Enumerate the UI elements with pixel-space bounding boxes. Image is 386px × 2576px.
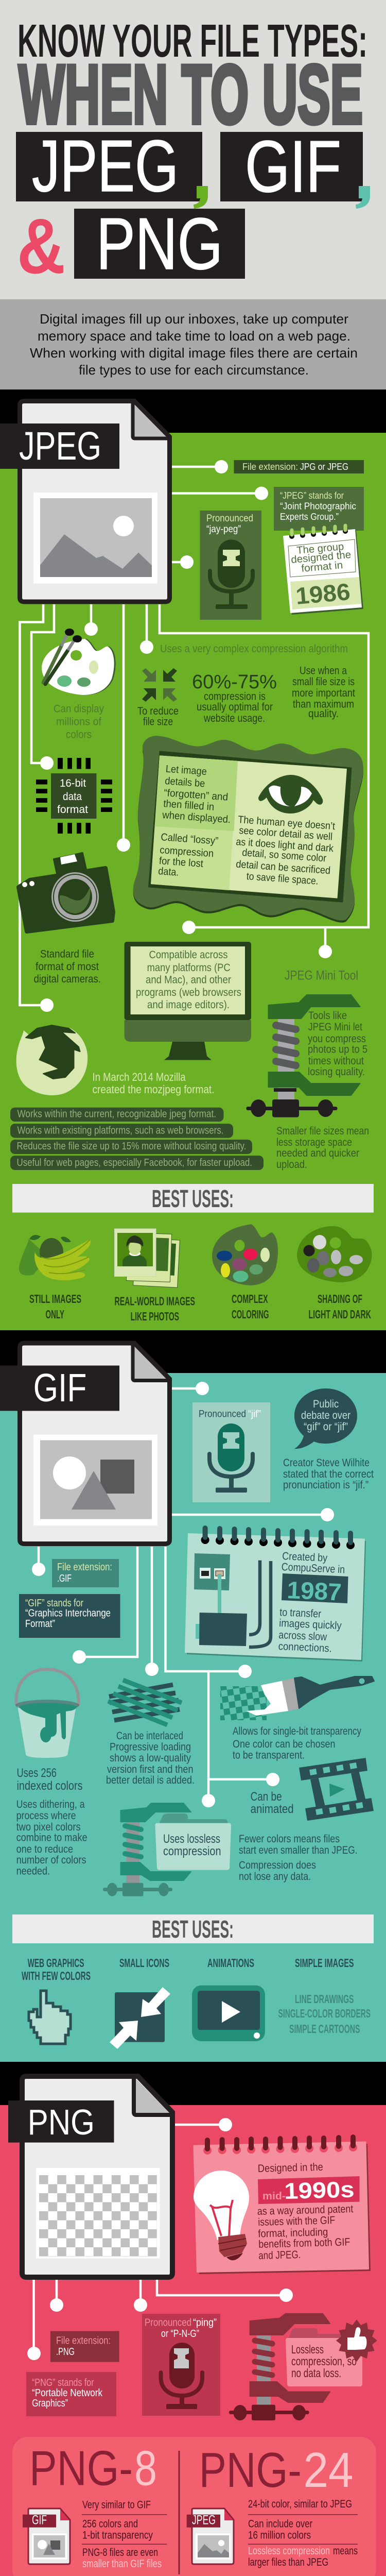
connector lines	[34, 2125, 283, 2349]
text: use when small: than maximum	[293, 699, 354, 710]
icon: 16-bit chip: format	[57, 804, 88, 816]
PNG-8 details: 1-bit transparency	[82, 2530, 153, 2541]
file extension box	[52, 1559, 119, 1587]
best use labels	[22, 1956, 354, 1982]
stands for box	[274, 487, 364, 531]
stands for box: “GIF” stands for	[25, 1598, 83, 1609]
text: mozjpeg: created the mozjpeg format.	[93, 1083, 214, 1096]
icon: clamp with folder: Uses lossless	[163, 1832, 220, 1846]
icon: crossing stripes	[108, 1680, 182, 1725]
text: creator: Creator Steve Wilhite	[283, 1457, 370, 1469]
stands for box: Format”	[25, 1618, 55, 1630]
text: indexed colors: indexed colors	[16, 1779, 82, 1793]
text: tools like JPEG mini: losing quality.	[308, 1066, 365, 1078]
text: dithering: combine to make	[16, 1832, 87, 1844]
tablet text: Let image	[165, 764, 207, 777]
text: smaller file sizes: needed and quicker	[276, 1147, 359, 1159]
text: tools like JPEG mini: times without	[308, 1055, 364, 1067]
text: smaller file sizes: upload.	[276, 1159, 307, 1171]
tablet	[149, 752, 351, 902]
PNG-24 details: 16 million colors	[248, 2530, 311, 2541]
notepad: 1986: designed the	[291, 549, 352, 566]
eye icon	[258, 775, 323, 814]
intro band	[0, 299, 386, 389]
icon: complex color palette	[212, 1224, 278, 1285]
stands for box	[19, 1594, 120, 1638]
panel: PNG-8 and PNG-24	[12, 2437, 376, 2576]
best uses banner: BEST USES:	[152, 1916, 234, 1943]
connector dots	[27, 2118, 293, 2360]
tablet text: then filled in	[163, 798, 215, 813]
black header band: PNG	[0, 2062, 386, 2105]
icon: 16-bit chip: data	[63, 791, 82, 803]
text: use when small: more important	[292, 687, 355, 699]
icon: thumbs up badge	[336, 2319, 377, 2362]
tablet text: detail can be sacrificed	[236, 859, 331, 876]
best use labels: ANIMATIONS	[207, 1956, 254, 1970]
best use labels	[29, 1292, 371, 1323]
pronounced box with microphone: “ping”	[193, 2317, 217, 2329]
PNG-8 details: 256 colors and	[82, 2518, 138, 2530]
icon: paint palette	[42, 629, 116, 695]
text: tools like JPEG mini: Tools like	[308, 1010, 347, 1022]
text: to reduce file size: file size	[143, 716, 173, 727]
best use labels: STILL IMAGES	[29, 1292, 81, 1306]
text: indexed colors	[16, 1766, 82, 1793]
PNG-24 details	[248, 2498, 358, 2568]
text: creator: pronunciation is “jif.”	[283, 1479, 369, 1491]
pronounced box with microphone: Pronounced	[199, 1409, 246, 1420]
text: tools like JPEG mini: photos up to 5	[308, 1044, 367, 1056]
icon: fruit	[19, 1235, 91, 1280]
monitor	[125, 942, 251, 1060]
text: tools like JPEG mini	[308, 1010, 367, 1078]
icon: small compress	[110, 1987, 170, 2049]
PNG-8 details: smaller than GIF files	[82, 2558, 162, 2570]
mozjpeg pills: Reduces the file size up to 15% more without losing quality.	[16, 1141, 246, 1152]
tablet text: as it does light and dark	[236, 836, 335, 854]
PNG-24 details: larger files than JPEG	[248, 2556, 328, 2568]
notepad: 1987	[185, 1528, 366, 1662]
icon: shading palette	[297, 1226, 372, 1282]
tablet text: see color detail as well	[239, 825, 333, 843]
icon: small JPEG file: JPEG	[192, 2513, 216, 2528]
icon: compress arrows	[142, 668, 177, 702]
icon: clamp with folder	[103, 1803, 231, 1896]
best use labels: ONLY	[45, 1308, 64, 1321]
notepad: 1986: The group	[296, 541, 344, 556]
pronounced box with microphone	[192, 1402, 270, 1502]
icon: firefox	[16, 1025, 87, 1095]
monitor: many platforms (PC	[147, 962, 231, 974]
speech bubble: “gif” or “jif”	[304, 1421, 348, 1433]
notepad: 1987: CompuServe in	[281, 1561, 345, 1575]
icon: clamp	[246, 995, 360, 1117]
text: mozjpeg	[93, 1071, 214, 1096]
file extension box	[50, 2331, 119, 2362]
intro text: When working with digital image files there are certain	[30, 345, 358, 361]
text: use when small: small file size is	[292, 676, 355, 688]
pronounced box with microphone: Pronounced	[206, 513, 253, 524]
speech bubble	[294, 1388, 357, 1449]
tablet text: data.	[158, 866, 179, 878]
notepad: 1986: format in	[301, 560, 343, 574]
blob with tablet	[133, 736, 363, 923]
text: interlaced: version first and then	[107, 1764, 194, 1775]
icon: 16-bit chip	[36, 758, 112, 834]
icon: GIF file	[20, 1343, 171, 1544]
text: dithering	[16, 1799, 87, 1877]
mozjpeg pills: Works within the current, recognizable jpeg format.	[17, 1109, 216, 1120]
notepad: mid-1990s: and JPEG.	[258, 2249, 301, 2262]
stands for box: “PNG” stands for	[32, 2377, 94, 2388]
text: millions of colors: millions of	[56, 716, 101, 727]
notepad: 1987: 1987	[287, 1576, 342, 1606]
teal comma	[356, 186, 370, 209]
PNG-24 details: Can include over	[248, 2518, 312, 2530]
text: interlaced: better detail is added.	[106, 1774, 195, 1786]
text: interlaced: shows a low-quality	[110, 1752, 191, 1764]
text: mozjpeg: In March 2014 Mozilla	[93, 1071, 186, 1083]
monitor: and Mac), and other	[146, 974, 231, 986]
text: single-bit transparency	[233, 1725, 361, 1761]
tablet text: compression	[160, 844, 214, 859]
text: standard file format: digital cameras.	[34, 973, 101, 985]
speech bubble: debate over	[301, 1410, 350, 1421]
text: to reduce file size: To reduce	[137, 705, 179, 717]
panel: JPEG	[0, 401, 386, 1330]
title	[16, 15, 370, 290]
text: use when small: Use when a	[300, 665, 347, 677]
PNG-24 details: means	[333, 2545, 358, 2557]
notepad: mid-1990s: 1990s	[284, 2177, 355, 2204]
stat: 60-75 percent: 60%-75%	[192, 671, 277, 693]
notepad: mid-1990s: Designed in the	[258, 2161, 323, 2175]
text: to reduce file size	[137, 705, 179, 727]
text: dithering: Uses dithering, a	[16, 1799, 85, 1810]
icon: paint bucket	[15, 1669, 79, 1758]
text: interlaced: Progressive loading	[110, 1741, 191, 1753]
PNG-24 details: Lossless compression	[248, 2545, 330, 2557]
text: dithering: two pixel colors	[16, 1821, 81, 1833]
panel: GIF	[0, 1343, 386, 2062]
best use labels: SMALL ICONS	[119, 1956, 169, 1970]
text: use when small	[292, 665, 355, 720]
black header band: JPEG	[0, 389, 386, 433]
notepad: 1986	[283, 526, 363, 615]
text: creator: stated that the correct	[283, 1468, 374, 1480]
icon: clamp with folder: compression	[163, 1844, 221, 1858]
icon: video player	[192, 1986, 265, 2041]
text: dithering: process where	[16, 1810, 76, 1822]
text: smaller file sizes: less storage space	[276, 1137, 352, 1148]
intro text: memory space and take time to load on a web page.	[38, 328, 350, 344]
best use labels: COMPLEX	[232, 1292, 268, 1306]
text: single-bit transparency: to be transparent.	[233, 1750, 305, 1761]
stat: 60-75 percent	[192, 671, 277, 724]
icon: film strip	[299, 1758, 374, 1821]
PNG-24 heading: 24	[304, 2443, 353, 2498]
icon: pixel hand	[29, 1991, 71, 2044]
file extension box: File extension:	[242, 462, 298, 472]
PNG title box: PNG	[96, 203, 223, 285]
intro text: file types to use for each circumstance.	[79, 362, 309, 378]
text: fewer colors: not lose any data.	[239, 1871, 311, 1883]
stands for box: Experts Group.”	[280, 512, 339, 522]
icon: small GIF file	[23, 2509, 70, 2564]
mozjpeg pills: Useful for web pages, especially Facebook, for faster upload.	[16, 1157, 252, 1168]
text: standard file format: format of most	[36, 961, 99, 973]
text: tools like JPEG mini: JPEG Mini let	[308, 1021, 362, 1033]
file extension box: File extension:	[56, 2335, 111, 2347]
notepad: mid-1990s	[194, 2137, 371, 2274]
PNG-8 details: PNG-8 files are even	[82, 2547, 158, 2558]
PNG-24 heading: PNG-	[199, 2443, 302, 2498]
best use labels: WITH FEW COLORS	[22, 1969, 91, 1982]
connector lines	[20, 467, 369, 1005]
file extension box: .PNG	[56, 2346, 75, 2358]
tablet text: Called “lossy”	[161, 832, 219, 847]
best use labels: WEB GRAPHICS	[28, 1956, 84, 1970]
intro text	[30, 311, 358, 378]
pronounced box with microphone: Pronounced	[145, 2317, 191, 2329]
stands for box: “Graphics Interchange	[25, 1607, 111, 1619]
network diagram	[194, 1553, 271, 1647]
icon: camera	[19, 853, 113, 931]
notepad: mid-1990s: mid-	[262, 2191, 286, 2202]
JPEG tag: JPEG	[19, 424, 101, 468]
notepad: 1987: connections.	[278, 1640, 332, 1655]
file extension box: File extension:	[57, 1562, 112, 1573]
text: compression algorithm heading: Uses a very complex compression algorithm	[160, 643, 348, 655]
tablet text: to save file space.	[246, 871, 319, 887]
JPEG title box: JPEG	[32, 125, 179, 207]
simple images list	[278, 1992, 371, 2036]
text: single-bit transparency: One color can be chosen	[233, 1738, 336, 1750]
text: millions of colors: colors	[66, 728, 92, 741]
text: fewer colors: start even smaller than JPEG.	[239, 1844, 358, 1856]
monitor: programs (web browsers	[136, 987, 241, 998]
text: interlaced	[106, 1730, 195, 1786]
best use labels: REAL-WORLD IMAGES	[114, 1295, 195, 1308]
text: dithering: number of colors	[16, 1854, 86, 1866]
text: fewer colors: Fewer colors means files	[239, 1833, 340, 1845]
notepad: mid-1990s: as a way around patent	[257, 2203, 354, 2217]
pronounced box with microphone: or “P-N-G”	[161, 2328, 199, 2340]
text: indexed colors: Uses 256	[16, 1766, 57, 1780]
tablet text: “forgotten” and	[164, 787, 229, 803]
PNG-8 heading: PNG-	[29, 2441, 133, 2496]
PNG-8 heading: 8	[134, 2441, 157, 2496]
connector dots	[40, 460, 332, 1012]
text: millions of colors	[54, 703, 104, 741]
best uses banner: BEST USES:	[152, 1185, 234, 1213]
stat: 60-75 percent: usually optimal for	[197, 701, 273, 713]
text: dithering: needed.	[16, 1865, 50, 1877]
stands for box: “Portable Network	[32, 2387, 103, 2399]
pronounced box with microphone	[142, 2314, 220, 2416]
tablet text	[158, 764, 336, 887]
best use labels: COLORING	[232, 1308, 269, 1321]
text: smaller file sizes: Smaller file sizes mean	[276, 1125, 369, 1137]
speech bubble: Public	[313, 1398, 339, 1410]
file extension box: .GIF	[57, 1573, 72, 1584]
stands for box: “JPEG” stands for	[280, 490, 344, 501]
best use labels: LIKE PHOTOS	[131, 1310, 179, 1323]
icon: light bulb	[194, 2171, 249, 2260]
mozjpeg pills	[10, 1108, 264, 1170]
icon: small JPEG file	[187, 2509, 234, 2564]
text: fewer colors	[239, 1833, 358, 1883]
text: millions of colors: Can display	[54, 703, 104, 715]
GIF tag: GIF	[33, 1366, 86, 1410]
connector dots	[32, 1382, 334, 1807]
GIF tag	[0, 1365, 119, 1411]
text: interlaced: Can be interlaced	[116, 1730, 183, 1742]
icon: paint brush	[220, 1676, 374, 1720]
text: smaller file sizes	[276, 1125, 369, 1171]
tablet text: detail, so some color	[242, 847, 327, 864]
text: tools like JPEG mini: you compress	[308, 1033, 366, 1045]
file extension box: JPG or JPEG	[300, 462, 348, 472]
PNG-24 details: 24-bit color, similar to JPEG	[248, 2498, 352, 2510]
icon: clamp with folder and thumbs up	[229, 2314, 377, 2420]
text: fewer colors: Compression does	[239, 1859, 316, 1871]
notepad: 1987: to transfer	[279, 1606, 322, 1620]
stands for box: “Joint Photographic	[280, 501, 356, 512]
text: dithering: one to reduce	[16, 1843, 73, 1855]
black header band: GIF	[0, 1330, 386, 1373]
panel: PNG	[0, 2076, 386, 2576]
notepad: 1987: images quickly	[279, 1617, 342, 1632]
tablet text: when displayed.	[162, 809, 231, 825]
stat: 60-75 percent: compression is	[204, 690, 266, 703]
monitor: and image editors).	[147, 999, 230, 1011]
tablet text: The human eye doesn’t	[238, 814, 336, 832]
PNG-8 details: Very similar to GIF	[82, 2499, 151, 2511]
stands for box	[26, 2372, 116, 2416]
mozjpeg pills: Works with existing platforms, such as web browsers.	[17, 1125, 223, 1137]
icon: small GIF file: GIF	[32, 2513, 47, 2528]
pronounced box with microphone: “jif”	[248, 1409, 261, 1420]
green comma	[194, 186, 208, 209]
text: creator	[283, 1457, 374, 1491]
file extension box	[234, 460, 364, 473]
icon: PNG file	[22, 2076, 174, 2277]
ampersand: &	[17, 202, 65, 290]
notepad: 1986: 1986	[294, 578, 351, 609]
icon: JPEG file	[20, 401, 171, 602]
icon: clamp with folder and thumbs up: Lossless	[291, 2343, 324, 2356]
notepad: mid-1990s: issues with the GIF	[258, 2214, 336, 2228]
notepad: mid-1990s: benefits from both GIF	[258, 2236, 350, 2250]
icon: photos	[114, 1229, 180, 1287]
tablet text: details be	[165, 775, 205, 789]
intro text: Digital images fill up our inboxes, take up computer	[40, 311, 348, 327]
heading: JPEG mini tool: JPEG Mini Tool	[285, 968, 358, 982]
stands for box: Graphics”	[32, 2398, 68, 2409]
text: can be animated: Can be	[251, 1790, 282, 1804]
best uses banner	[12, 1914, 374, 1943]
text: use when small: quality.	[308, 708, 339, 720]
best uses banner	[12, 1184, 374, 1213]
icon: clamp with folder and thumbs up: compression, so	[291, 2354, 357, 2368]
pronounced box with microphone: “jay-peg”	[206, 524, 241, 535]
notepad: 1987: across slow	[278, 1629, 327, 1643]
PNG-8 details	[82, 2499, 167, 2570]
PNG tag: PNG	[28, 2102, 95, 2142]
text: can be animated	[251, 1790, 294, 1816]
text: standard file format	[34, 948, 101, 985]
stat: 60-75 percent: website usage.	[203, 713, 265, 724]
GIF title box: GIF	[245, 126, 341, 208]
icon: 16-bit chip: 16-bit	[60, 777, 86, 789]
notepad: 1987: Created by	[282, 1550, 328, 1564]
icon: clamp with folder and thumbs up: no data loss.	[291, 2366, 341, 2380]
pronounced box with microphone	[200, 511, 261, 620]
notepad: mid-1990s: format, including	[258, 2226, 328, 2240]
tablet text: for the lost	[159, 855, 204, 870]
text: can be animated: animated	[251, 1802, 294, 1816]
connector lines	[39, 1388, 323, 1798]
text: standard file format: Standard file	[40, 948, 94, 960]
monitor: Compatible across	[149, 949, 227, 961]
